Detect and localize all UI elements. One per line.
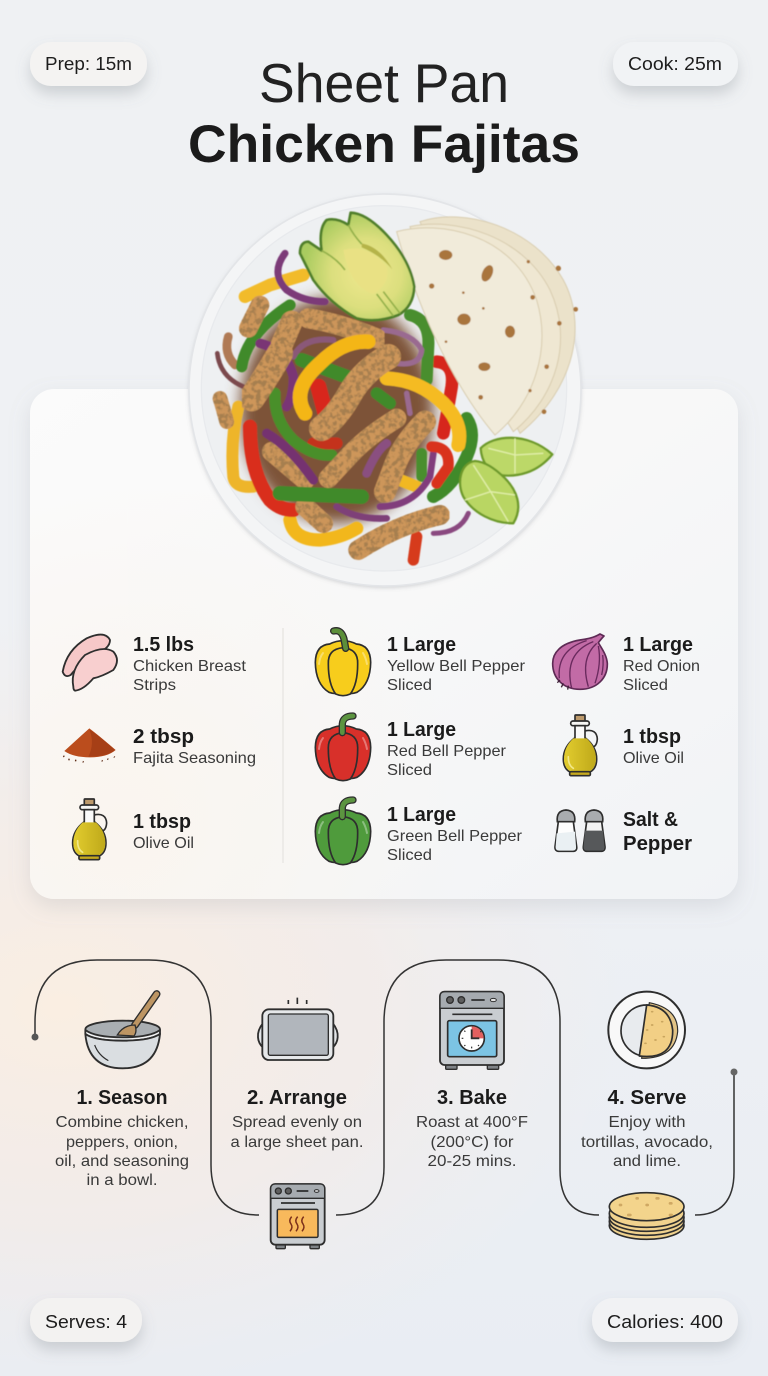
text: olive oil quantity: Olive Oil — [133, 835, 194, 852]
avocado — [300, 213, 414, 320]
pill: cook time: Cook: 25m — [628, 54, 722, 74]
text: step 2: a large sheet pan. — [230, 1134, 364, 1151]
text: green pepper: 1 Large — [387, 804, 456, 826]
icon: green bell pepper — [315, 800, 371, 865]
icon: plate with tortilla — [608, 992, 685, 1068]
text: step 4: and lime. — [613, 1153, 681, 1170]
step 2: arrange — [230, 998, 364, 1151]
text: step 3: (200°C) for — [430, 1134, 514, 1151]
icon: red onion — [553, 634, 607, 690]
text: step 3: Roast at 400°F — [416, 1114, 528, 1131]
underlay shadow — [240, 297, 433, 523]
pill: prep time: Prep: 15m — [45, 54, 132, 74]
text: green pepper: Sliced — [387, 847, 432, 864]
icon: mixing bowl — [85, 994, 160, 1068]
text: red pepper: 1 Large — [387, 719, 456, 741]
process path — [32, 960, 738, 1215]
text: yellow pepper: Sliced — [387, 677, 432, 694]
text: step 2: Spread evenly on — [232, 1114, 362, 1131]
text: olive oil quantity — [623, 726, 684, 767]
ingredient: seasoning — [63, 726, 256, 767]
step 4: serve — [581, 992, 713, 1170]
pill: cook time — [613, 42, 738, 86]
text: red onion: Sliced — [623, 677, 668, 694]
ingredient: yellow pepper — [315, 631, 526, 696]
pill: serves — [30, 1298, 142, 1342]
ingredient: salt and pepper — [555, 809, 692, 855]
icon: red bell pepper — [315, 716, 371, 781]
hero image: plate of fajitas — [189, 194, 581, 586]
limes — [460, 438, 552, 523]
icon: oil bottle — [563, 715, 597, 776]
ingredient: olive oil left — [73, 799, 194, 860]
pill: calories: Calories: 400 — [607, 1312, 723, 1332]
ingredient: green pepper — [315, 800, 523, 865]
text: green pepper: Green Bell Pepper — [387, 828, 523, 845]
ingredient: chicken — [63, 634, 247, 694]
ingredient: red pepper — [315, 716, 507, 781]
text: olive oil quantity — [133, 811, 194, 852]
icon: oil bottle — [73, 799, 107, 860]
pill: calories — [592, 1298, 738, 1342]
text: salt and pepper: Pepper — [623, 833, 692, 855]
pill: serves: Serves: 4 — [45, 1312, 127, 1332]
text: step 3 — [416, 1087, 528, 1170]
text: red pepper: Sliced — [387, 762, 432, 779]
icon: yellow bell pepper — [315, 631, 371, 696]
icon: spice mound — [63, 728, 116, 762]
text: step 4: 4. Serve — [608, 1087, 686, 1109]
text: seasoning quantity: Fajita Seasoning — [133, 750, 256, 767]
icon: oven with timer — [440, 992, 504, 1069]
text: chicken quantity: 1.5 lbs — [133, 634, 194, 656]
ingredient: red onion — [553, 634, 700, 694]
text: step 1: oil, and seasoning — [55, 1153, 189, 1170]
text: green pepper — [387, 804, 523, 864]
text: step 4: tortillas, avocado, — [581, 1134, 713, 1151]
text: olive oil quantity: 1 tbsp — [133, 811, 191, 833]
text: chicken quantity: Strips — [133, 677, 176, 694]
text: red pepper — [387, 719, 507, 779]
text: salt and pepper: Salt & — [623, 809, 678, 831]
text: step 1 — [55, 1087, 189, 1189]
text: chicken quantity — [133, 634, 247, 694]
text: step 3: 3. Bake — [437, 1087, 507, 1109]
icon: sheet pan — [258, 998, 338, 1060]
text: seasoning quantity: 2 tbsp — [133, 726, 194, 748]
panel: ingredients card — [30, 389, 738, 899]
divider — [282, 628, 284, 863]
text: step 3: 20-25 mins. — [428, 1153, 516, 1170]
text: red onion: Red Onion — [623, 658, 700, 675]
title: Sheet Pan — [259, 52, 509, 114]
icon: oven with heat — [271, 1184, 325, 1249]
pill: prep time — [30, 42, 147, 86]
text: red onion: 1 Large — [623, 634, 693, 656]
text: yellow pepper: 1 Large — [387, 634, 456, 656]
text: salt and pepper — [623, 809, 692, 855]
text: step 1: peppers, onion, — [66, 1134, 178, 1151]
title — [188, 52, 580, 174]
text: step 4 — [581, 1087, 713, 1170]
icon: salt and pepper shakers — [555, 810, 605, 851]
text: step 1: Combine chicken, — [56, 1114, 188, 1131]
text: seasoning quantity — [133, 726, 256, 767]
text: olive oil quantity: 1 tbsp — [623, 726, 681, 748]
text: chicken quantity: Chicken Breast — [133, 658, 247, 675]
text: step 2: 2. Arrange — [247, 1087, 347, 1109]
text: step 1: 1. Season — [76, 1087, 168, 1109]
icon: tortilla stack — [609, 1193, 684, 1239]
text: step 1: in a bowl. — [86, 1172, 158, 1189]
text: red onion — [623, 634, 700, 694]
title: Chicken Fajitas — [188, 115, 580, 174]
icon: chicken breast — [63, 635, 117, 691]
step 1: season — [55, 994, 189, 1189]
text: yellow pepper: Yellow Bell Pepper — [387, 658, 526, 675]
ingredient: olive oil right — [563, 715, 684, 776]
text: step 4: Enjoy with — [608, 1114, 686, 1131]
text: yellow pepper — [387, 634, 526, 694]
text: red pepper: Red Bell Pepper — [387, 743, 507, 760]
text: olive oil quantity: Olive Oil — [623, 750, 684, 767]
tortillas — [397, 217, 575, 435]
step 3: bake — [416, 992, 528, 1170]
text: step 2 — [230, 1087, 364, 1151]
